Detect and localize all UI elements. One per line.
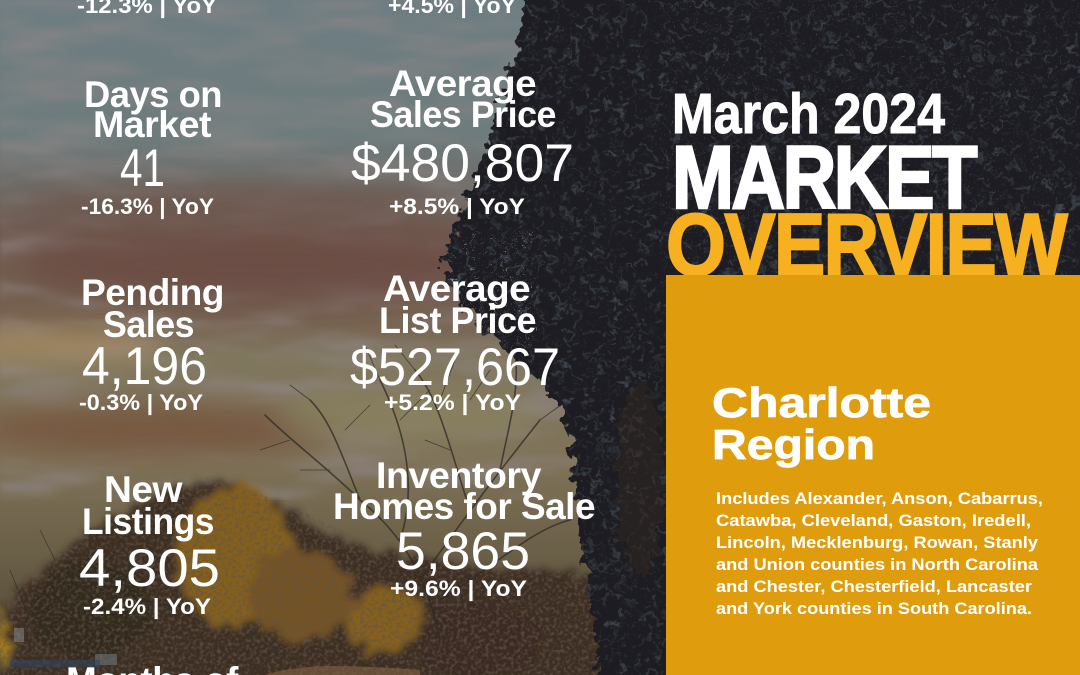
text block: counties description: Lincoln, Mecklenburg, Rowan, Stanly [716, 534, 1039, 552]
stat: Days on Market: 41 [120, 139, 165, 198]
text block: counties description: Includes Alexander, Anson, Cabarrus, [716, 490, 1043, 508]
heading: Charlotte Region: Charlotte [712, 379, 931, 426]
stat: Average Sales Price: Sales Price [370, 94, 556, 135]
stat: New Listings: Listings [82, 501, 214, 542]
stat: Average Sales Price: +8.5% | YoY [389, 194, 525, 219]
heading: MARKET: MARKET [672, 127, 977, 227]
stat: Pending Sales: 4,196 [82, 337, 207, 396]
stat: Inventory Homes for Sale: Inventory [376, 455, 542, 496]
stat: Average List Price: Average [383, 268, 530, 309]
stat: Inventory Homes for Sale: 5,865 [396, 522, 530, 581]
heading: Charlotte Region: Region [712, 421, 875, 468]
stat: Inventory Homes for Sale: +9.6% | YoY [390, 576, 527, 601]
text block: counties description: and York counties in South Carolina. [716, 600, 1032, 618]
stat: Average List Price: +5.2% | YoY [384, 390, 521, 415]
stat: Days on Market: Days on [84, 74, 222, 115]
stat: Pending Sales: Sales [103, 304, 194, 345]
stat: Inventory Homes for Sale [333, 455, 595, 601]
background: dark evergreen tree [438, 0, 1080, 675]
stat: Inventory Homes for Sale: Homes for Sale [333, 486, 595, 527]
stat: Average Sales Price: $480,807 [351, 134, 574, 193]
stat: Pending Sales [79, 272, 224, 415]
stat: Days on Market: -16.3% | YoY [81, 194, 214, 219]
heading: March 2024: March 2024 [672, 82, 945, 146]
stat: Average List Price [350, 268, 560, 415]
stat: Pending Sales: Pending [81, 272, 224, 313]
stat: Days on Market: Market [93, 104, 211, 145]
stat: New Listings [79, 469, 220, 619]
panel: Charlotte Region [666, 275, 1080, 675]
text block: counties description: Catawba, Cleveland, Gaston, Iredell, [716, 512, 1031, 530]
text block: counties description [716, 490, 1043, 618]
background: foliage and bare trees lower left [0, 320, 620, 675]
stat: Average List Price: $527,667 [350, 338, 560, 397]
text block: counties description: and Chester, Chesterfield, Lancaster [716, 578, 1033, 596]
title block [666, 82, 1068, 294]
stat: Average List Price: List Price [379, 300, 536, 341]
stat: New Listings: 4,805 [79, 539, 220, 598]
stat: New Listings: -2.4% | YoY [83, 594, 211, 619]
stat: Pending Sales: -0.3% | YoY [79, 390, 203, 415]
stat: Days on Market [81, 74, 222, 219]
stat: Average Sales Price: Average [389, 63, 536, 104]
stat: New Listings: New [104, 469, 183, 510]
stat: Average Sales Price [351, 63, 574, 219]
text block: counties description: and Union counties in North Carolina [716, 556, 1039, 574]
heading: Charlotte Region [712, 379, 931, 468]
